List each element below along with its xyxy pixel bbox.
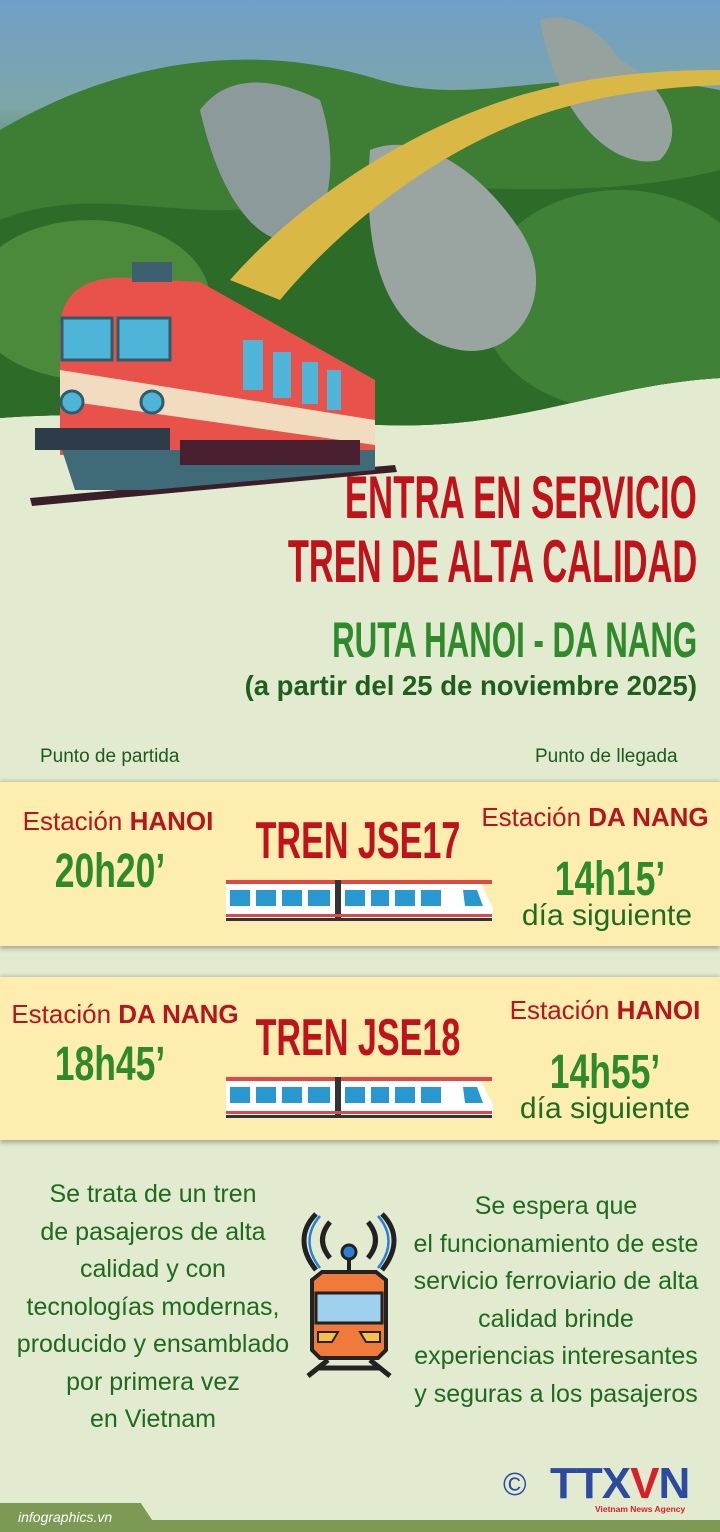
text block: left description: en Vietnam xyxy=(90,1405,216,1433)
logo: TTXVN: Vietnam News Agency xyxy=(595,1504,685,1514)
logo: TTXVN: © xyxy=(503,1466,527,1502)
text block: left description: de pasajeros de alta xyxy=(40,1218,266,1246)
footer tab: infographics.vn: infographics.vn xyxy=(18,1509,112,1525)
text block: left description: Se trata de un tren xyxy=(49,1180,257,1208)
icon: connected train xyxy=(302,1212,396,1378)
title: TREN DE ALTA CALIDAD xyxy=(288,528,697,595)
text block: left description: calidad y con xyxy=(80,1255,226,1283)
title: ENTRA EN SERVICIO xyxy=(345,464,697,531)
logo: TTXVN xyxy=(503,1459,689,1514)
text block: left description xyxy=(17,1180,289,1433)
panel: train JSE18 xyxy=(0,977,720,1140)
icon: train xyxy=(226,1077,493,1118)
text block: right description: experiencias interesantes xyxy=(414,1342,698,1370)
label: arrival: Punto de llegada xyxy=(535,746,678,767)
logo: TTXVN: TTXVN xyxy=(550,1459,689,1508)
text block: right description: servicio ferroviario de alta xyxy=(414,1267,698,1295)
text block: right description: y seguras a los pasajeros xyxy=(414,1380,698,1408)
text block: right description xyxy=(414,1192,698,1408)
panel: train JSE17: 14h15’ xyxy=(555,853,665,906)
text block: right description: calidad brinde xyxy=(478,1304,634,1332)
date: (a partir del 25 de noviembre 2025) xyxy=(245,670,697,701)
footer bar xyxy=(0,1520,720,1532)
panel: train JSE18: Estación HANOI xyxy=(510,995,700,1025)
panel: train JSE18: Estación DA NANG xyxy=(11,999,239,1029)
panel: train JSE17 xyxy=(0,782,720,946)
subtitle: route: RUTA HANOI - DA NANG xyxy=(332,612,697,668)
panel: train JSE17: Estación DA NANG xyxy=(481,802,709,832)
panel: train JSE17: 20h20’ xyxy=(55,845,165,898)
text block: left description: tecnologías modernas, xyxy=(27,1292,279,1320)
panel: train JSE17: TREN JSE17 xyxy=(256,812,460,870)
text block: left description: por primera vez xyxy=(66,1368,240,1396)
text block: right description: Se espera que xyxy=(475,1192,637,1220)
panel: train JSE17: día siguiente xyxy=(522,899,692,932)
panel: train JSE18: 18h45’ xyxy=(55,1038,165,1091)
icon: train xyxy=(226,880,493,921)
background photo: mountains and golden bridge xyxy=(0,0,720,426)
panel: train JSE18: TREN JSE18 xyxy=(256,1009,460,1067)
panel: train JSE18: día siguiente xyxy=(520,1092,690,1125)
panel: train JSE18: 14h55’ xyxy=(550,1046,660,1099)
label: departure: Punto de partida xyxy=(40,746,179,767)
text block: right description: el funcionamiento de este xyxy=(414,1230,698,1258)
text block: left description: producido y ensamblado xyxy=(17,1330,289,1358)
title xyxy=(288,464,697,595)
footer tab: infographics.vn xyxy=(0,1503,152,1525)
icon: red locomotive xyxy=(30,262,397,506)
panel: train JSE17: Estación HANOI xyxy=(23,806,213,836)
